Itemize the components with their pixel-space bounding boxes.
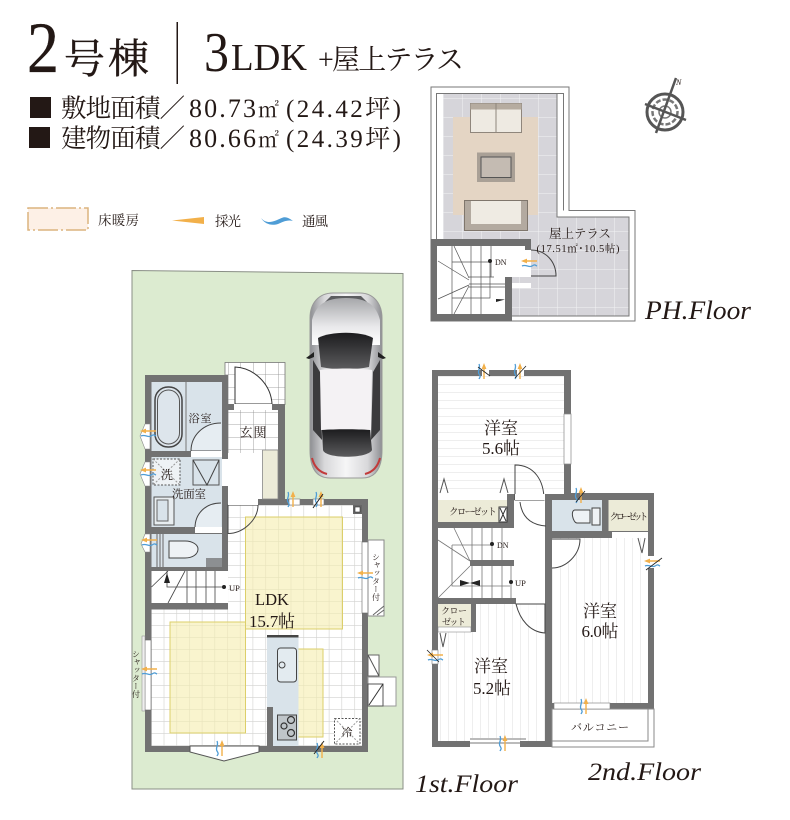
- terrace label: 屋上テラス: [549, 226, 611, 241]
- first floor site and plan: [132, 270, 403, 789]
- left window with shutter: [132, 636, 151, 711]
- lot: [132, 270, 403, 789]
- rooftop stair block: [430, 239, 531, 321]
- car: [306, 293, 386, 478]
- LDK label: LDK: [255, 590, 290, 609]
- site area line: ㎡: [258, 99, 279, 122]
- title: building number: 2: [27, 8, 59, 88]
- right window with shutter: [362, 540, 384, 616]
- closet 2: クローゼット: [610, 512, 648, 523]
- closet 3: クロー: [441, 606, 467, 616]
- legend: [28, 208, 328, 230]
- sofa bottom: [464, 200, 528, 230]
- second floor plan: [427, 363, 662, 751]
- title: layout type: 3: [204, 22, 229, 84]
- right window with shutter: シャッター付: [372, 553, 380, 602]
- vent mark: [521, 259, 537, 267]
- washroom: 洗面室: [172, 487, 206, 501]
- wall under stairs: [438, 598, 545, 604]
- toilet: [152, 534, 222, 567]
- title divider: [176, 22, 178, 84]
- vent marks: [427, 363, 662, 751]
- closet 1: [438, 500, 507, 522]
- room 5.6: 洋室: [484, 419, 518, 438]
- room 5.2: 洋室: [474, 657, 508, 676]
- PH floor label: PH.Floor: [644, 296, 752, 325]
- site area line: 80.73: [189, 94, 256, 123]
- LDK label: 15.7帖: [249, 612, 295, 631]
- windows on LDK top: [289, 499, 300, 505]
- bottom bay window: [190, 746, 259, 761]
- site area line: 敷地面積／: [61, 94, 185, 123]
- DN marker: DN: [495, 258, 507, 267]
- title: layout type: +屋上テラス: [318, 44, 464, 76]
- room 6.0: 6.0帖: [582, 622, 618, 641]
- title: layout type: [204, 22, 464, 84]
- genkan: [228, 404, 278, 499]
- washroom: 洗: [161, 467, 173, 482]
- legend: daylight: [172, 213, 242, 229]
- title: layout type: LDK: [231, 37, 308, 79]
- outdoor units: [368, 655, 396, 706]
- walls: [432, 370, 654, 747]
- floor heating zones: [170, 517, 342, 737]
- washroom: [152, 457, 228, 533]
- legend: daylight: 採光: [215, 213, 242, 229]
- room 5.2: [438, 598, 545, 747]
- side vents: [140, 424, 373, 758]
- bath: [152, 382, 222, 457]
- room 5.2: 5.2帖: [473, 679, 511, 698]
- terrace tile: [443, 94, 629, 316]
- DN marker: [488, 258, 507, 267]
- car mirrors: [306, 352, 386, 359]
- LDK door: [228, 505, 258, 534]
- stairs to upper floor: [152, 571, 240, 603]
- room 5.6: [438, 376, 571, 500]
- windshield: [318, 333, 373, 369]
- terrace label: (17.51㎡･10.5帖): [536, 242, 620, 255]
- 2nd floor label: 2nd.Floor: [588, 759, 701, 786]
- refrigerator: [334, 718, 360, 744]
- hall: [438, 500, 545, 598]
- walls: [145, 375, 368, 752]
- entrance porch: [225, 362, 285, 404]
- 1st floor label: 1st.Floor: [415, 771, 518, 798]
- toilet: [552, 500, 602, 531]
- closet 2: [608, 500, 648, 531]
- site area line: (24.42坪): [286, 96, 401, 123]
- legend: floor heating: [28, 208, 139, 230]
- building area line: 建物面積／: [61, 124, 185, 153]
- room 6.0: [552, 532, 648, 703]
- title: building number: [27, 8, 149, 88]
- kitchen: [267, 635, 298, 746]
- rear window: [322, 429, 372, 457]
- building area line: ㎡: [258, 129, 279, 152]
- door: [531, 250, 556, 276]
- stairs: [438, 528, 526, 598]
- balcony: バルコニー: [571, 722, 629, 734]
- rug: [453, 117, 538, 215]
- table: [477, 152, 515, 182]
- site area line: [30, 94, 401, 123]
- left window with shutter: シャッター付: [132, 650, 140, 699]
- tail lights: [312, 458, 380, 474]
- side windows: [313, 360, 380, 440]
- rooftop floor plan: [430, 87, 635, 321]
- balcony: [552, 703, 654, 747]
- room 5.6: 5.6帖: [482, 439, 520, 458]
- stairs: DN: [497, 541, 509, 550]
- terrace label: [536, 226, 620, 255]
- building area line: 80.66: [189, 124, 256, 153]
- compass: N: [675, 78, 682, 87]
- stairs to upper floor: UP: [229, 583, 240, 593]
- compass: [645, 78, 686, 133]
- legend: ventilation: [261, 214, 328, 229]
- building area line: (24.39坪): [286, 126, 401, 153]
- genkan: 玄関: [240, 425, 266, 440]
- wall below stairs: [151, 603, 228, 610]
- legend: floor heating: 床暖房: [98, 212, 139, 228]
- sofa top: [470, 103, 522, 133]
- parapet outline: [431, 87, 635, 321]
- refrigerator: 冷: [342, 726, 352, 739]
- LDK label: [249, 590, 295, 631]
- duct: [353, 505, 362, 514]
- roof: [320, 368, 372, 430]
- window frames: [432, 650, 438, 664]
- LDK floor: [152, 499, 362, 746]
- legend: ventilation: 通風: [302, 214, 328, 229]
- closet 3: [438, 604, 476, 647]
- closet 3: ゼット: [442, 617, 466, 627]
- room 6.0: 洋室: [583, 602, 617, 621]
- building area line: [29, 124, 401, 153]
- bath: 浴室: [188, 411, 212, 425]
- title: building number: 号棟: [64, 36, 149, 82]
- stairs: UP: [515, 578, 526, 588]
- stairs: [438, 246, 505, 314]
- closet 1: クローゼット: [449, 507, 497, 518]
